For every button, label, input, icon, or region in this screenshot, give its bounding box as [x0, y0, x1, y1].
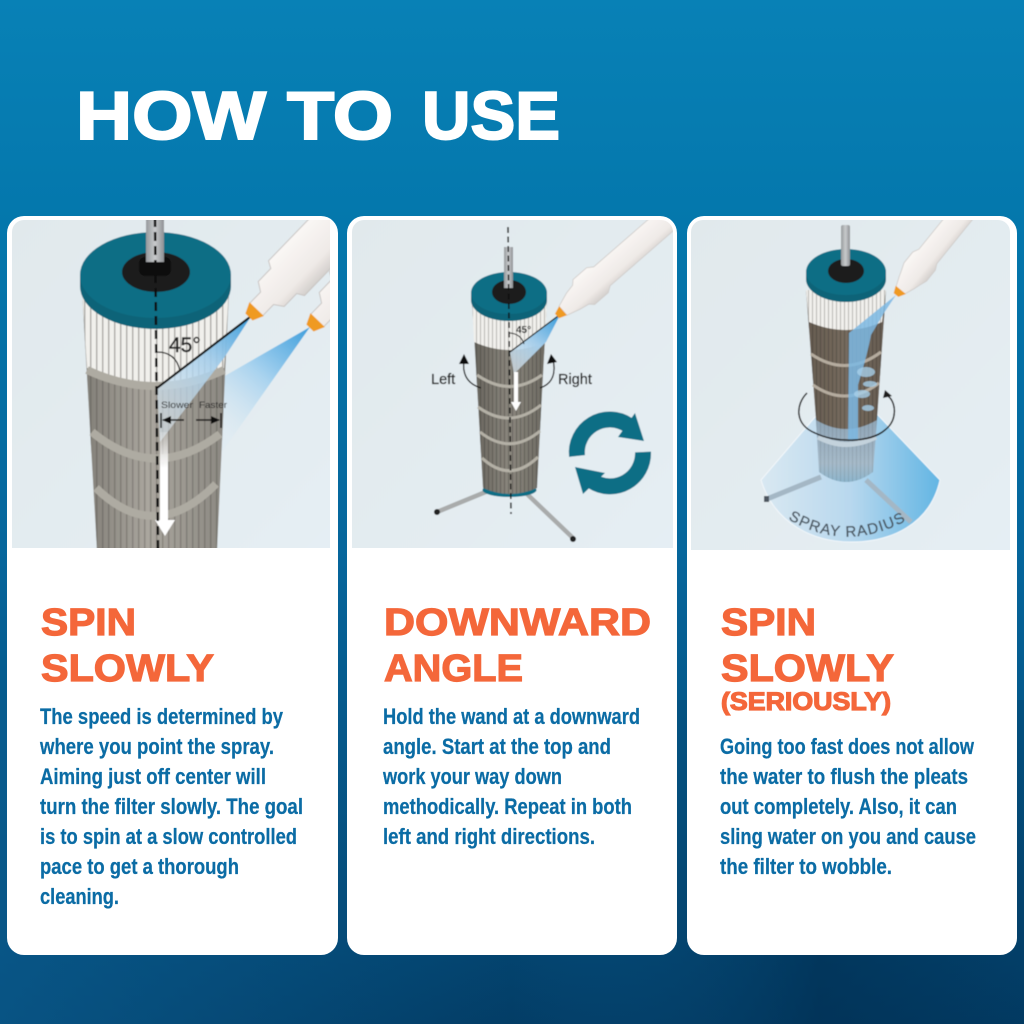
wand 2 — [306, 270, 330, 332]
body text: is to spin at a slow controlled — [40, 824, 297, 849]
body text: methodically. Repeat in both — [383, 794, 632, 819]
right label and arrow — [540, 354, 592, 388]
body text — [720, 734, 976, 879]
illustration: filter with two spray angles — [12, 220, 330, 548]
body text: left and right directions. — [383, 824, 595, 849]
title: USE — [422, 78, 560, 154]
spray radius sector — [761, 413, 940, 542]
heading: DOWNWARD — [384, 602, 651, 644]
angle label: 45° — [169, 334, 201, 357]
panel: spin slowly seriously — [687, 216, 1017, 955]
body text: Hold the wand at a downward — [383, 704, 640, 729]
heading: ANGLE — [384, 648, 523, 690]
body text: the water to flush the pleats — [720, 764, 968, 789]
wand — [893, 220, 973, 298]
icon: rotation arrows — [575, 413, 644, 494]
heading — [384, 602, 651, 690]
body text: Aiming just off center will — [40, 764, 266, 789]
panel: downward angle — [347, 205, 681, 955]
rotation arrow — [799, 390, 894, 440]
angle label: 45° — [516, 325, 531, 336]
body text: out completely. Also, it can — [720, 794, 957, 819]
body text: pace to get a thorough — [40, 854, 239, 879]
speed labels: Slower — [161, 400, 193, 411]
wand — [554, 220, 673, 319]
heading — [721, 602, 894, 716]
body text: work your way down — [382, 764, 562, 789]
body text: where you point the spray. — [39, 734, 274, 759]
heading: (SERIOUSLY) — [721, 688, 891, 716]
title: HOW — [76, 78, 267, 154]
body text: the filter to wobble. — [720, 854, 892, 879]
speed labels — [161, 400, 227, 428]
heading: SLOWLY — [721, 648, 894, 690]
body text: turn the filter slowly. The goal — [40, 794, 303, 819]
heading: SPIN — [41, 602, 136, 644]
panel: spin slowly — [7, 216, 338, 955]
left label and arrow: Left — [431, 372, 455, 388]
title: TO — [287, 78, 393, 154]
spray and water sheet — [848, 295, 896, 440]
body text — [382, 704, 640, 849]
spray radius label: SPRAY RADIUS — [789, 510, 905, 538]
heading: SLOWLY — [41, 648, 214, 690]
wand 1 — [245, 220, 330, 321]
title — [76, 78, 560, 154]
illustration: filter with spray radius — [691, 220, 1010, 550]
right label and arrow: Right — [558, 372, 592, 388]
heading: SPIN — [721, 602, 816, 644]
body text: angle. Start at the top and — [383, 734, 611, 759]
illustration: filter on stand with rotation — [350, 205, 681, 550]
body text: The speed is determined by — [40, 704, 283, 729]
speed labels: Faster — [199, 400, 227, 411]
left label and arrow — [431, 354, 481, 388]
heading — [41, 602, 214, 690]
body text — [39, 704, 303, 909]
body text: cleaning. — [40, 884, 119, 909]
